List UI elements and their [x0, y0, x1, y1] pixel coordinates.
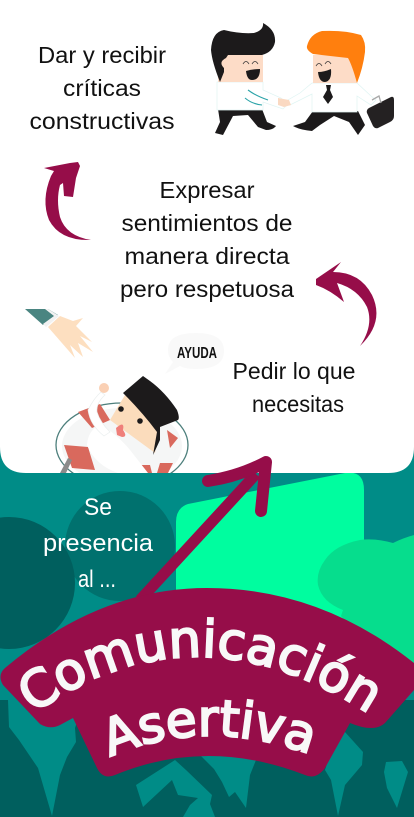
shape: bright green speech bubble — [176, 473, 364, 700]
panel: white content card — [0, 0, 414, 473]
text: se presencia al: Se — [84, 494, 112, 521]
heading: dar y recibir críticas: Dar y recibir — [38, 42, 166, 68]
banner title line two: Asertiva — [109, 698, 313, 758]
banner title line one: Comunicación — [20, 617, 378, 713]
banner: comunicación asertiva — [0, 588, 414, 776]
heading: dar y recibir críticas: constructivas — [30, 108, 174, 134]
heading: expresar sentimientos: Expresar — [160, 177, 255, 203]
speech bubble: ayuda: AYUDA — [177, 345, 217, 362]
figure: orange-haired man — [278, 31, 394, 135]
heading: expresar sentimientos — [120, 177, 294, 302]
heading: pedir lo que necesitas: Pedir lo que — [232, 358, 356, 384]
briefcase — [367, 97, 394, 128]
heading: dar y recibir críticas — [30, 42, 174, 134]
shape: darkest teal circle — [0, 517, 75, 649]
tie — [323, 85, 333, 104]
heading: pedir lo que necesitas: necesitas — [252, 391, 344, 417]
illustration: handshake — [211, 23, 394, 135]
text: se presencia al: presencia — [43, 530, 154, 557]
text: se presencia al: al ... — [78, 566, 116, 593]
heading: dar y recibir críticas: críticas — [63, 75, 141, 101]
shape: dark teal circle — [65, 491, 175, 601]
heading: expresar sentimientos: pero respetuosa — [120, 276, 294, 302]
heading: pedir lo que necesitas — [232, 358, 356, 417]
figure: black-haired man — [211, 23, 288, 135]
arrow: curved back-left — [316, 262, 376, 346]
crowd silhouette — [0, 700, 414, 817]
heading: expresar sentimientos: manera directa — [124, 243, 290, 269]
arrow: main from banner to card — [140, 462, 266, 600]
shape: medium green bubble — [318, 535, 414, 690]
text: se presencia al — [43, 494, 154, 593]
heading: expresar sentimientos: sentimientos de — [122, 210, 292, 236]
arrow: curved up-left — [44, 162, 91, 240]
speech bubble: ayuda — [165, 333, 224, 374]
illustration: helping hand — [25, 309, 93, 358]
illustration: person in life ring — [55, 376, 189, 473]
